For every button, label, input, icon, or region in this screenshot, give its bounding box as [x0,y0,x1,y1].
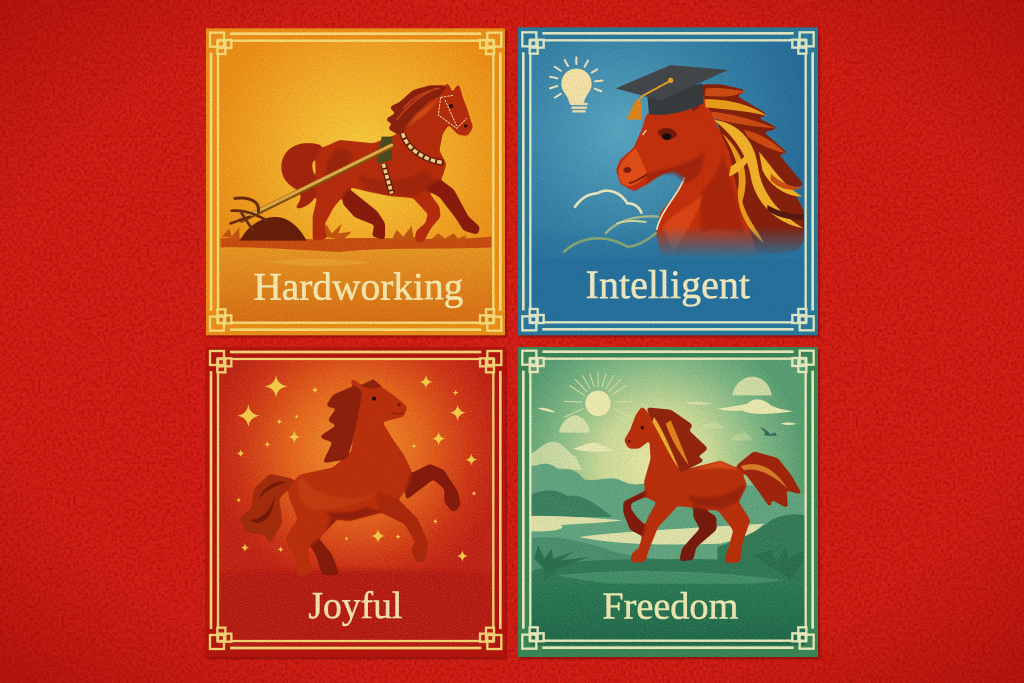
eye and nostril [641,426,644,429]
ear [688,88,702,117]
tail [240,475,293,543]
mane [647,408,707,472]
graduation cap [616,65,728,120]
tail strands [250,482,287,523]
label: Intelligent: Intelligent [586,262,750,307]
shading [297,475,380,510]
label: Freedom: Freedom [602,586,739,628]
panel: Joyful [205,347,507,659]
horse head with mane [617,85,803,258]
head and neck [617,88,757,258]
tail [737,452,801,508]
sky [531,359,805,645]
fade to water [531,227,805,259]
sparkles [236,375,477,562]
clouds [531,377,797,470]
panel: Freedom [518,347,820,659]
foreground ground [531,545,805,645]
jaw shading [647,152,704,183]
muzzle [618,148,647,186]
far hind leg [343,185,384,239]
body [313,83,472,242]
collar harness [403,133,443,163]
frame [522,32,814,330]
far front leg [425,175,479,234]
far hind leg [680,504,716,561]
far front leg [406,465,460,512]
tail highlights [741,464,787,489]
scene background [218,359,494,645]
bent front leg [624,490,659,536]
bridle [438,95,467,128]
shading [326,148,353,177]
panel: Hardworking [206,28,507,338]
icon: lightbulb [550,57,602,111]
mane base [701,85,803,253]
label: Joyful: Joyful [308,585,402,627]
mane strands [705,88,746,97]
sun with rays [564,371,632,417]
texture [531,359,805,645]
body [286,379,411,576]
plough [231,145,392,230]
grass and soil mound [222,217,467,241]
scene background [531,40,805,323]
mane [386,86,447,135]
saddle pad and girth [377,137,393,164]
near front leg [377,490,427,563]
horse: trotting [624,407,801,562]
hills and lakes [531,464,805,585]
icon: bird [759,427,777,436]
eye and nostril [372,397,376,401]
frame [522,351,814,649]
scene background [220,41,492,323]
ground [220,237,492,323]
label: Hardworking: Hardworking [253,264,463,308]
panel: Intelligent [518,27,820,338]
texture [220,41,492,323]
mane [320,386,362,463]
texture [218,359,494,645]
texture [531,40,805,323]
shading [687,485,746,509]
neck highlight edge [657,177,685,230]
body [625,407,750,562]
clouds and waves [564,191,658,252]
frame [210,33,501,331]
far hind leg [307,515,340,574]
eye [657,128,677,140]
horse: pulling plough [282,83,479,242]
tail [282,144,322,208]
frame [210,351,501,649]
ground [218,570,494,645]
eye and nostril [449,104,453,108]
horse: rearing [240,379,460,576]
